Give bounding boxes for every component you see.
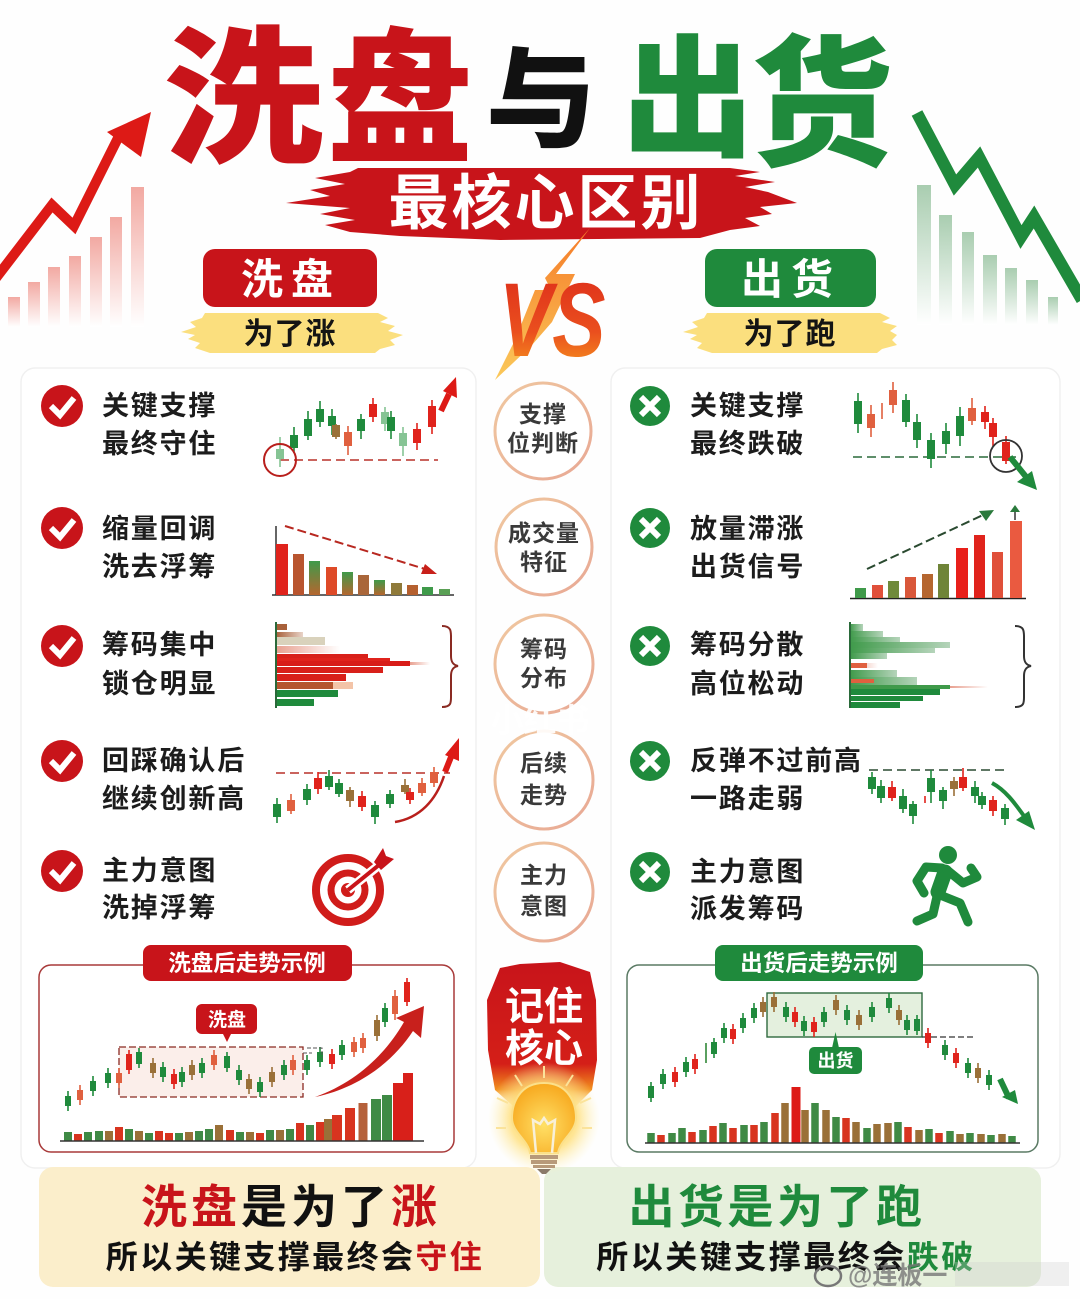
candlesticks bbox=[651, 992, 989, 1102]
row text bbox=[690, 746, 863, 814]
icon: check bbox=[41, 625, 83, 667]
row text: 回踩确认后 bbox=[102, 746, 246, 776]
VS lightning bbox=[495, 228, 605, 380]
panel: left bbox=[21, 368, 476, 1168]
left header: 洗盘: 洗盘 bbox=[241, 256, 341, 303]
panel: right example chart bbox=[627, 945, 1038, 1152]
chart heading: 出货后走势示例 bbox=[740, 951, 898, 976]
criterion 4: 走势 bbox=[520, 782, 568, 808]
candlestick chart: weak bounce bbox=[869, 768, 1035, 830]
left header: 洗盘 bbox=[181, 249, 403, 353]
row text: 出货信号 bbox=[690, 552, 805, 582]
icon: light bulb bbox=[488, 1062, 600, 1174]
icon: cross bbox=[630, 852, 670, 892]
remember core banner bbox=[487, 962, 597, 1112]
row text: 关键支撑 bbox=[102, 391, 217, 421]
row text: 最终守住 bbox=[102, 429, 217, 459]
right row 3 bbox=[630, 622, 1031, 708]
candlestick chart: retest and new high bbox=[276, 738, 459, 824]
left row 1 bbox=[41, 377, 457, 476]
candlestick chart: support holds bbox=[264, 377, 457, 476]
bar chart: rising volume bbox=[850, 505, 1026, 598]
icon: cross bbox=[630, 508, 670, 548]
row text: 洗去浮筹 bbox=[102, 552, 217, 582]
volume bars bbox=[60, 1073, 424, 1141]
row text bbox=[690, 514, 805, 582]
lightning bolt bbox=[495, 228, 590, 380]
icon: cross bbox=[630, 741, 670, 781]
watermark: weibo bbox=[815, 1262, 1069, 1290]
subtitle banner bbox=[286, 168, 797, 240]
conclusion: right: 所以关键支撑最终会跌破 bbox=[596, 1239, 976, 1275]
left row 3 bbox=[41, 622, 458, 708]
breakdown line bbox=[922, 1036, 974, 1038]
conclusion: right bbox=[544, 1167, 1041, 1287]
row text: 最终跌破 bbox=[690, 429, 805, 459]
icon: running man bbox=[917, 846, 977, 922]
criterion 5: 主力 bbox=[520, 862, 568, 888]
criterion 1 bbox=[495, 383, 591, 479]
row text bbox=[102, 630, 217, 699]
bar chart: shrinking volume bbox=[272, 526, 454, 595]
row text: 继续创新高 bbox=[102, 784, 246, 814]
right falling bars bbox=[917, 185, 1058, 325]
icon: cross bbox=[630, 626, 670, 666]
row text bbox=[690, 391, 805, 459]
criterion 4: 后续 bbox=[520, 750, 568, 776]
panel: right bbox=[611, 368, 1060, 1168]
title: 与 bbox=[486, 11, 596, 171]
right row 4 bbox=[630, 741, 1035, 830]
candlesticks bbox=[68, 978, 407, 1111]
icon: cross bbox=[630, 386, 670, 426]
right header: 出货: 为了跑 bbox=[744, 318, 836, 351]
row text: 派发筹码 bbox=[690, 894, 805, 924]
falling arrow bbox=[1000, 1079, 1018, 1104]
remember core banner: 核心 bbox=[505, 1028, 583, 1071]
row text bbox=[102, 391, 217, 459]
title bbox=[163, 0, 893, 196]
candlestick chart: support breaks bbox=[853, 382, 1037, 490]
row text: 放量滞涨 bbox=[690, 514, 805, 544]
panel: left example chart bbox=[39, 945, 454, 1152]
icon: check bbox=[41, 850, 83, 892]
watermark: weibo: @连板一 bbox=[848, 1262, 947, 1290]
right row 1 bbox=[630, 382, 1037, 490]
row text bbox=[102, 856, 217, 923]
washout tag bbox=[196, 1004, 257, 1042]
icon: target bbox=[316, 848, 394, 922]
row text bbox=[102, 514, 217, 582]
row text: 筹码分散 bbox=[690, 630, 805, 660]
row text bbox=[102, 746, 246, 814]
conclusion: left: 所以关键支撑最终会守住 bbox=[106, 1239, 484, 1275]
criterion 5: 意图 bbox=[520, 893, 568, 919]
row text: 缩量回调 bbox=[102, 514, 217, 544]
icon: check bbox=[41, 507, 83, 549]
row text: 筹码集中 bbox=[102, 630, 217, 660]
row text: 高位松动 bbox=[690, 668, 805, 699]
distribution tag bbox=[809, 1032, 862, 1074]
criterion 3: 筹码 bbox=[520, 636, 568, 662]
left rising bars bbox=[8, 187, 144, 327]
distribution zone bbox=[767, 993, 922, 1037]
row text: 一路走弱 bbox=[690, 784, 805, 814]
conclusion: right: 出货是为了跑 bbox=[628, 1181, 926, 1233]
remember core banner: 记住 bbox=[505, 986, 583, 1029]
right row 5 bbox=[630, 846, 977, 924]
icon: check bbox=[41, 740, 83, 782]
volume bars bbox=[645, 1087, 1020, 1143]
conclusion: left bbox=[39, 1167, 540, 1287]
criterion 5 bbox=[495, 843, 593, 941]
right header: 出货 bbox=[683, 249, 897, 353]
criterion 4 bbox=[495, 731, 593, 829]
VS letters: VS bbox=[499, 261, 605, 379]
row text: 锁仓明显 bbox=[102, 669, 217, 699]
row text: 主力意图 bbox=[690, 857, 805, 887]
icon: check bbox=[41, 385, 83, 427]
criterion 2: 成交量 bbox=[508, 520, 580, 546]
chip distribution chart bbox=[850, 622, 1031, 708]
row text: 反弹不过前高 bbox=[690, 746, 863, 776]
distribution tag: 出货 bbox=[818, 1050, 854, 1071]
conclusion: left: 洗盘是为了涨 bbox=[141, 1181, 441, 1233]
subtitle banner: 最核心区别 bbox=[388, 170, 704, 237]
row text bbox=[690, 630, 805, 699]
criterion 2: 特征 bbox=[520, 549, 568, 575]
left row 2 bbox=[41, 507, 454, 595]
criterion 3: 分布 bbox=[520, 665, 568, 691]
left row 5 bbox=[41, 848, 394, 923]
row text: 主力意图 bbox=[102, 856, 217, 886]
left row 4 bbox=[41, 738, 459, 824]
right row 2 bbox=[630, 505, 1026, 598]
row text: 洗掉浮筹 bbox=[102, 893, 217, 923]
criterion 1: 位判断 bbox=[507, 430, 579, 456]
criterion 1: 支撑 bbox=[519, 401, 567, 427]
chart heading bbox=[143, 945, 352, 981]
watermark: 小红书: 小红书 bbox=[490, 702, 590, 739]
criterion 3 bbox=[495, 615, 593, 713]
right green falling arrow bbox=[917, 113, 1080, 300]
chip distribution chart bbox=[276, 622, 458, 708]
row text bbox=[690, 857, 805, 924]
washout zone bbox=[119, 1047, 303, 1097]
right header: 出货: 出货 bbox=[741, 256, 841, 303]
row text: 关键支撑 bbox=[690, 391, 805, 421]
chart heading: 洗盘后走势示例 bbox=[168, 951, 326, 976]
criterion 2 bbox=[496, 499, 592, 595]
washout tag: 洗盘 bbox=[208, 1008, 246, 1031]
rising arrow bbox=[315, 1006, 424, 1097]
chart heading bbox=[715, 945, 923, 981]
left header: 洗盘: 为了涨 bbox=[244, 318, 336, 351]
centre labels bbox=[495, 383, 593, 941]
left red rising arrow bbox=[0, 112, 151, 278]
